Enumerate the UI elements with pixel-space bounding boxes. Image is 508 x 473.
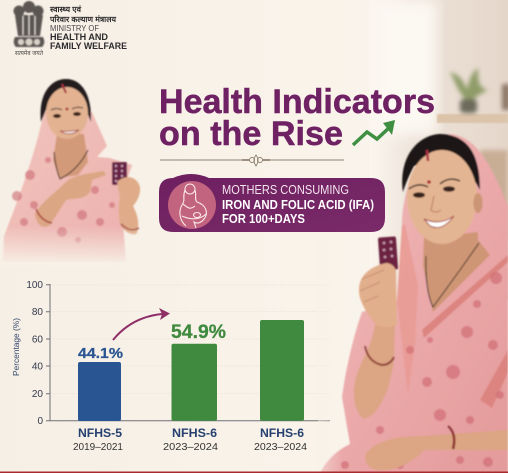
ministry name: परिवार कल्याण मंत्रालय [49,14,116,24]
y axis tick labels: 80 [32,307,43,318]
grid lines [50,285,330,394]
y axis title: Percentage (%) [11,318,21,376]
veil and saree [3,100,132,262]
badge text: FOR 100+DAYS [222,212,305,226]
hair [402,134,480,192]
badge: mothers consuming IFA [159,174,385,232]
lower arm and hand [365,430,508,470]
value label 44.1%: 44.1% [78,345,123,362]
ministry name: HEALTH AND [50,32,108,42]
bar chart [11,280,330,453]
icon: state emblem [14,1,44,47]
x axis labels: NFHS-6 [260,428,304,440]
ornamental divider [160,155,344,166]
bar: NFHS-6 second [260,320,304,421]
x axis labels: NFHS-5 [78,428,123,440]
saree flower pattern [341,272,504,469]
neck and chest [423,232,490,312]
facial features [51,84,83,134]
x axis labels: 2019–2021 [73,442,123,453]
bangle right [121,224,139,230]
left soft fade beside woman [318,240,342,473]
title: Health Indicators [159,83,435,121]
y axis tick labels: 100 [26,280,43,291]
y axis tick labels: 0 [37,416,43,427]
icon: rising trend arrow [353,120,395,145]
necklace [54,150,88,179]
x axis labels: NFHS-6 [172,428,217,440]
bangle raised arm [365,346,394,365]
saree fold border [422,255,508,408]
raised arm [354,322,395,419]
bangles left [36,209,52,223]
raised hand [359,263,397,327]
necklace [426,243,479,307]
ministry name: FAMILY WELFARE [50,41,127,51]
y axis tick labels: 40 [32,362,43,372]
ministry name: स्वास्थ्य एवं [49,5,82,14]
bar: NFHS-6 [172,344,217,421]
face [46,87,88,139]
saree pattern [12,157,115,243]
hair [41,79,91,122]
arrow: increase [113,308,170,340]
y axis tick labels: 20 [32,389,43,400]
y axis tick labels [26,280,43,427]
right hand and arm [117,177,140,234]
x axis labels: 2023–2024 [254,442,307,453]
bottom fade [0,226,150,266]
badge text: MOTHERS CONSUMING [222,183,349,197]
badge text: IRON AND FOLIC ACID (IFA) [222,198,374,212]
background: blurred room [370,0,508,300]
bangle lower arm [448,426,454,449]
emblem motto: सत्यमेव जयते [15,49,44,57]
badge text [222,183,374,226]
x axis labels [73,428,307,453]
bar: NFHS-5 [78,362,121,421]
tablet strip [378,236,398,271]
pointing arm [35,171,106,227]
ministry name [49,5,127,51]
tablet strip [112,162,127,185]
title [159,83,435,153]
icon: pregnant woman [168,181,216,229]
ear [474,193,482,213]
header: ministry logo [14,1,127,57]
axes [46,284,330,421]
face [407,150,477,244]
neck and chest [53,134,88,178]
x axis labels: 2023–2024 [163,442,218,453]
illustration: woman holding tablets (right) [320,134,508,473]
illustration: woman pointing at tablets (left) [0,79,150,266]
ministry name: MINISTRY OF [50,23,99,33]
saree [320,134,508,473]
facial features [409,150,460,228]
y axis tick labels: 60 [32,334,43,346]
veil border [397,225,418,395]
bottom red border [0,472,508,473]
value label 54.9%: 54.9% [171,322,226,343]
title: on the Rise [159,115,343,153]
